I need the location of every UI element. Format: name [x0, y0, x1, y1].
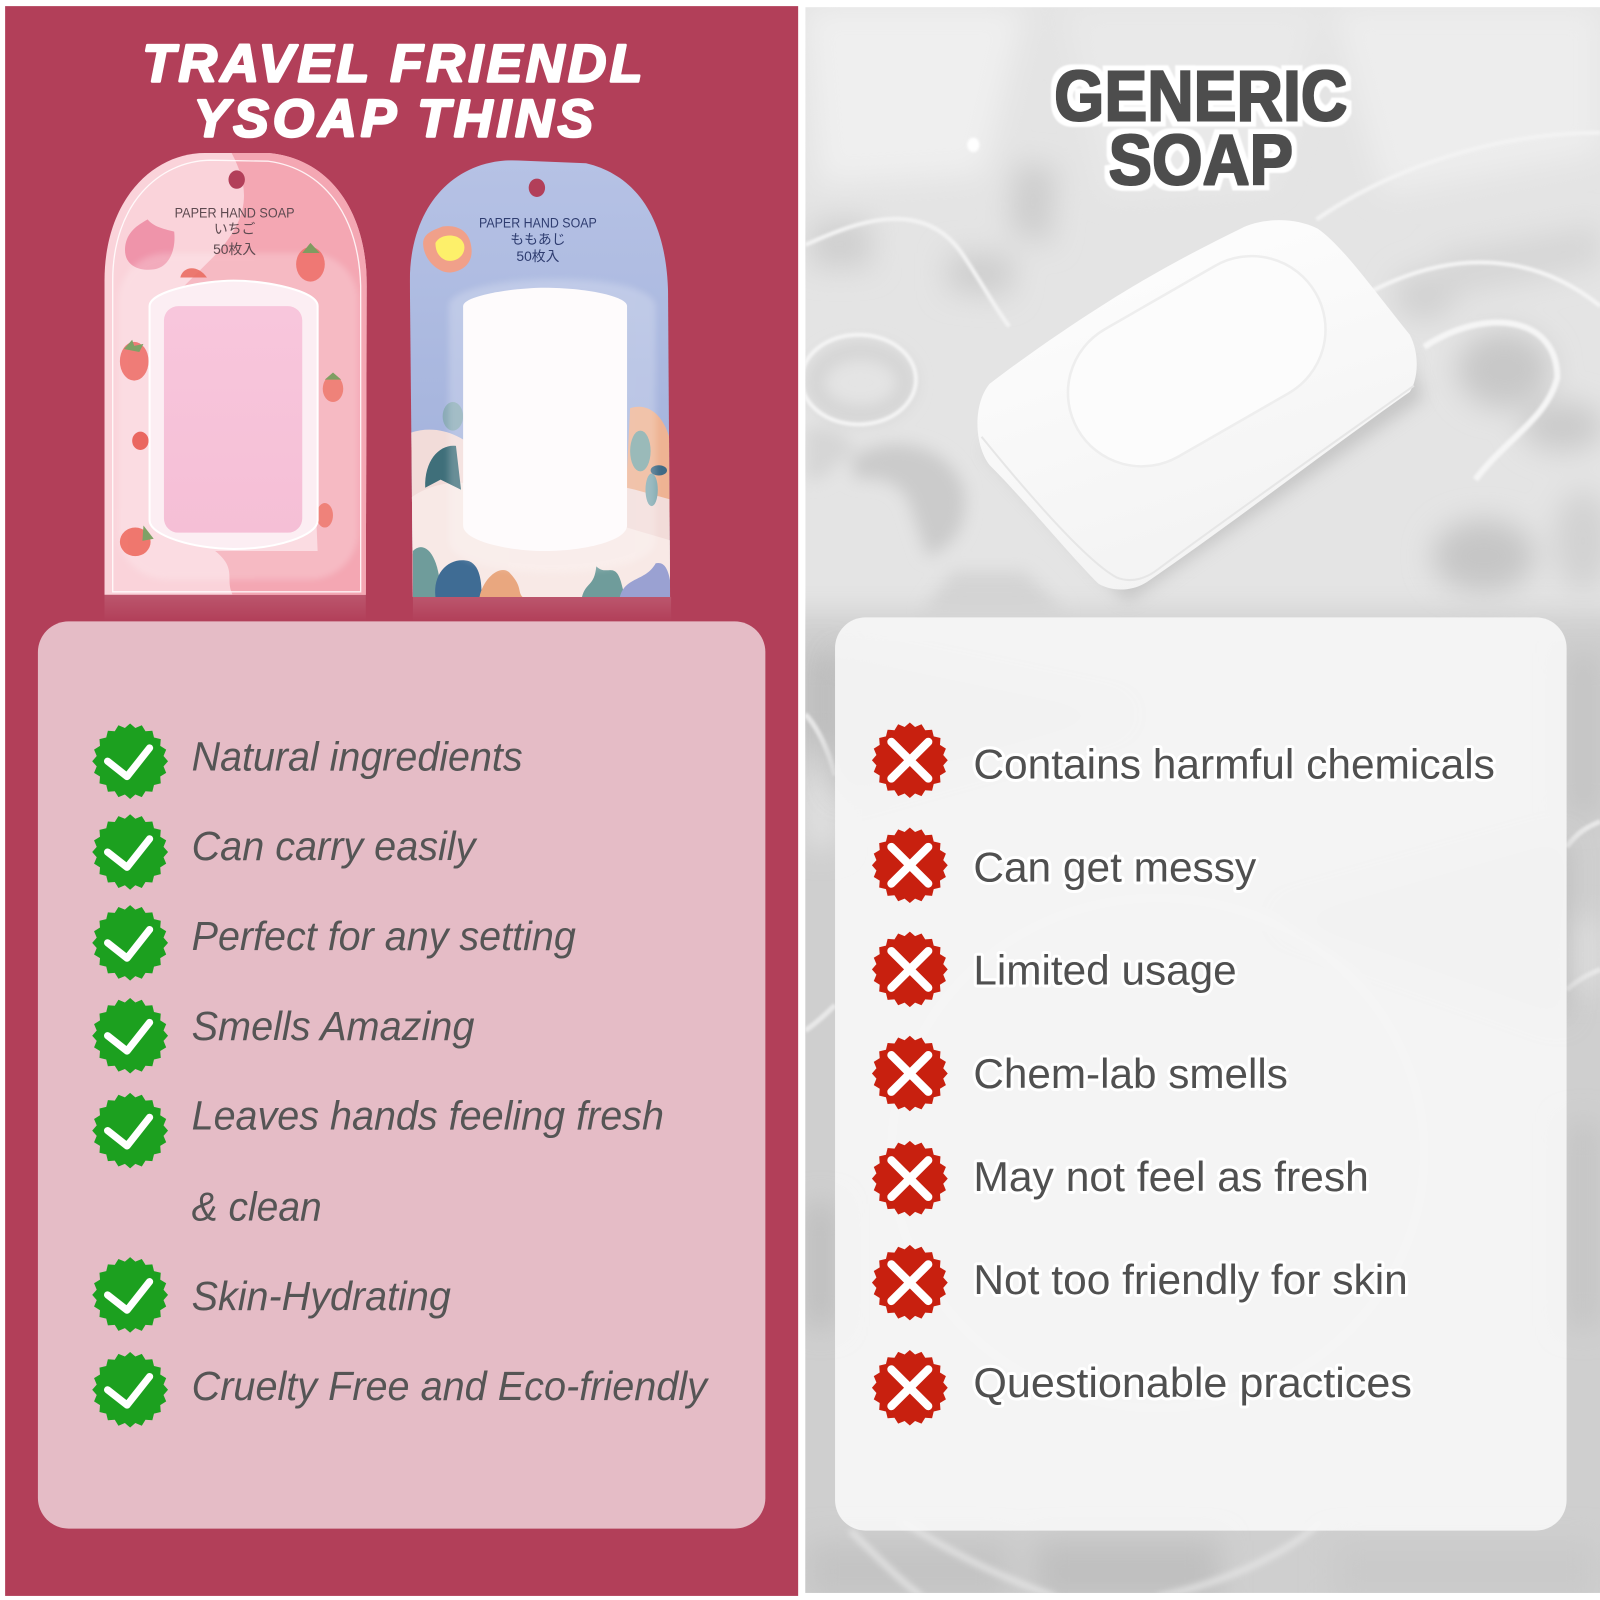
benefit: smells amazing: Smells Amazing — [192, 1003, 475, 1049]
drawback: limited usage: Limited usage — [973, 947, 1237, 994]
benefit: can carry easily — [92, 814, 478, 890]
drawback: questionable practices — [872, 1350, 1412, 1426]
drawback: contains harmful chemicals — [872, 722, 1495, 798]
title: travel friendly soap thins: TRAVEL FRIENDL — [142, 35, 642, 94]
image: white soap bar — [977, 220, 1424, 602]
title: generic soap: GENERIC — [1054, 57, 1347, 136]
drawback: may not feel as fresh — [872, 1141, 1369, 1216]
product: pink paper soap pack: 50枚入 — [213, 242, 256, 257]
benefit: perfect for any setting: Perfect for any setting — [192, 913, 576, 959]
drawback: can get messy: Can get messy — [973, 844, 1256, 891]
product: pink paper soap pack — [102, 151, 369, 602]
drawback: contains harmful chemicals: Contains harmful chemicals — [973, 741, 1495, 788]
blister — [118, 253, 359, 580]
panel: benefits card — [38, 621, 765, 1529]
benefit: leaves hands fresh: Leaves hands feeling fresh — [192, 1093, 664, 1139]
benefit: natural ingredients — [92, 723, 523, 799]
benefit: natural ingredients: Natural ingredients — [192, 733, 523, 779]
benefit: cruelty free and eco-friendly — [92, 1352, 709, 1428]
drawback: not too friendly for skin: Not too friendly for skin — [973, 1256, 1408, 1303]
lower mottled water around the card — [805, 608, 1600, 1593]
benefit: skin-hydrating — [92, 1257, 451, 1333]
product: blue paper soap pack — [408, 158, 672, 602]
drawback: limited usage — [872, 932, 1237, 1007]
panel: travel friendly soap thins — [5, 6, 798, 1596]
title: travel friendly soap thins: YSOAP THINS — [194, 90, 593, 149]
drawback: may not feel as fresh: May not feel as fresh — [973, 1153, 1369, 1200]
product: pink paper soap pack: いちご — [214, 222, 256, 237]
background: water ripple — [805, 7, 1600, 1593]
drawback: chem-lab smells — [872, 1036, 1288, 1111]
product: pack reflections — [105, 595, 671, 621]
panel: generic soap — [805, 7, 1600, 1593]
benefit: smells amazing — [92, 998, 475, 1073]
benefit: leaves hands fresh — [92, 1093, 664, 1229]
title: travel friendly soap thins — [142, 35, 642, 149]
drawback: chem-lab smells: Chem-lab smells — [973, 1050, 1288, 1097]
title: generic soap: SOAP — [1109, 121, 1293, 201]
drawback: can get messy — [872, 828, 1256, 903]
product: blue paper soap pack: 50枚入 — [516, 249, 560, 264]
benefit: skin-hydrating: Skin-Hydrating — [192, 1273, 451, 1319]
drawback: questionable practices: Questionable practices — [973, 1359, 1412, 1406]
benefit: cruelty free and eco-friendly: Cruelty Free and Eco-friendly — [192, 1363, 709, 1409]
product: pink paper soap pack: PAPER HAND SOAP — [175, 205, 295, 220]
product: blue paper soap pack: ももあじ — [510, 232, 566, 247]
panel: drawbacks card — [835, 617, 1567, 1531]
benefit: leaves hands fresh: & clean — [192, 1183, 322, 1229]
benefit: perfect for any setting — [92, 905, 576, 981]
title: generic soap — [1054, 57, 1347, 201]
drawback: not too friendly for skin — [872, 1245, 1408, 1320]
benefit: can carry easily: Can carry easily — [192, 823, 478, 869]
product: blue paper soap pack: PAPER HAND SOAP — [479, 216, 597, 231]
